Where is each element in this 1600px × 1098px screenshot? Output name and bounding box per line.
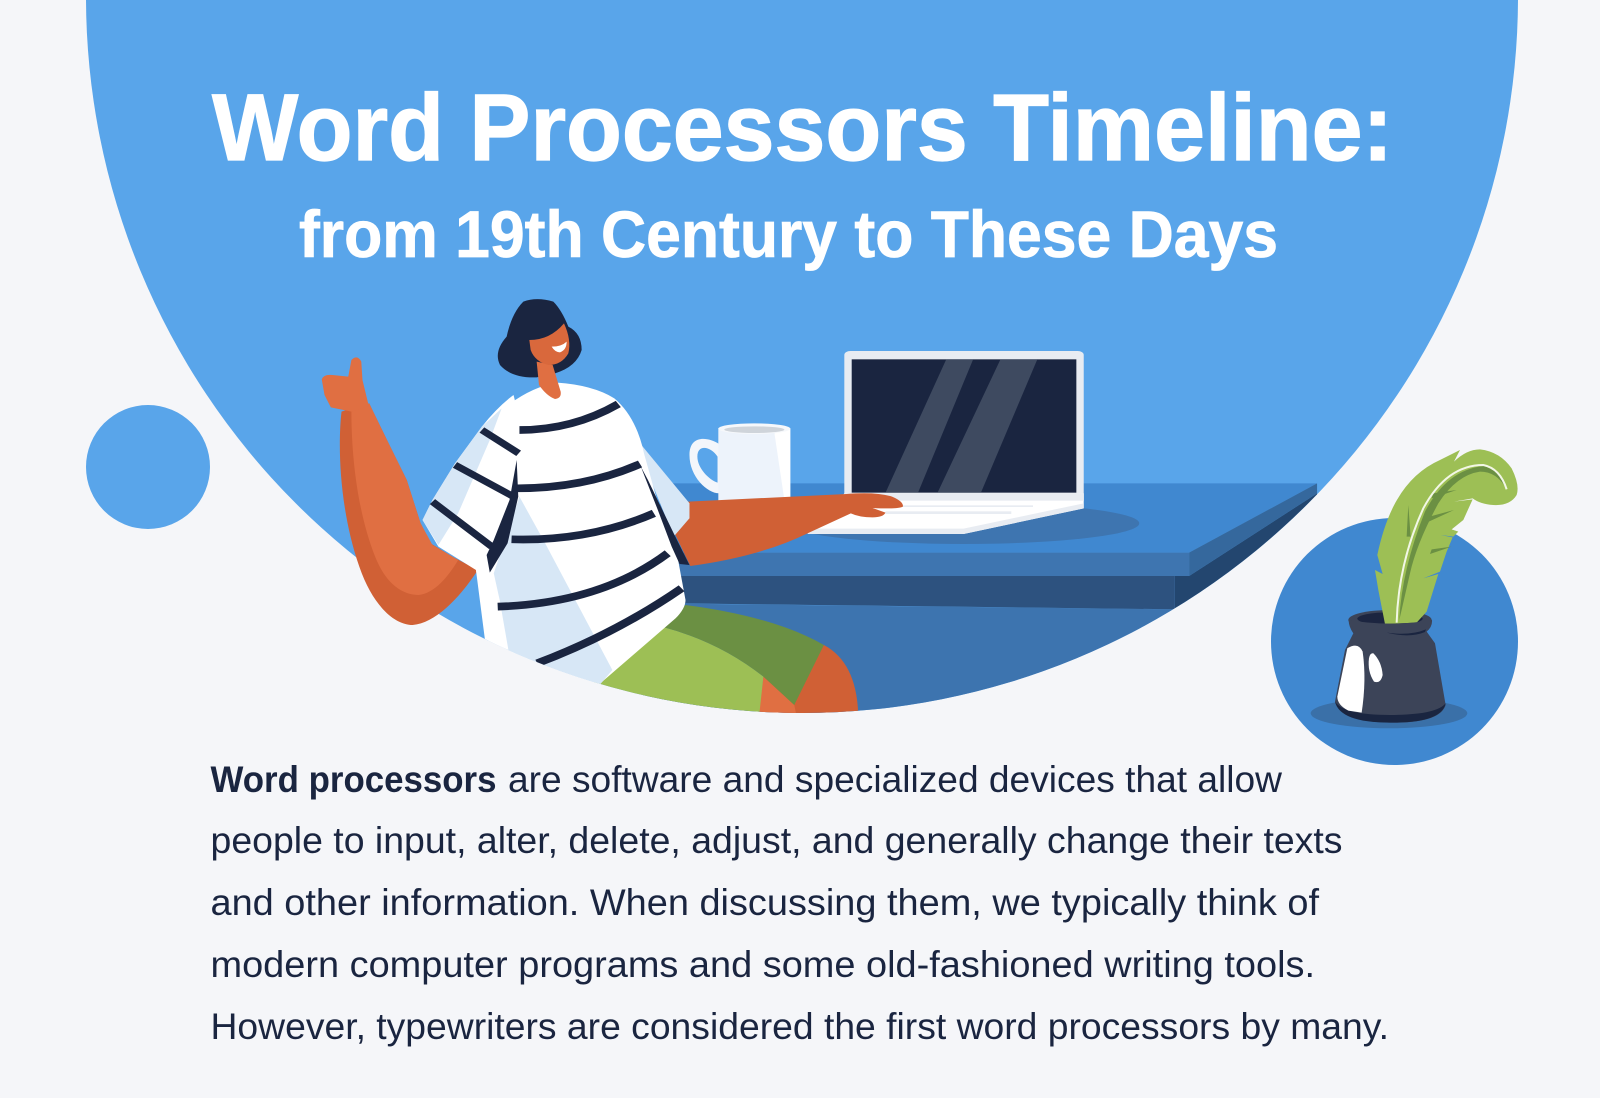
- line 1 bold term: Word processors: [210, 759, 496, 800]
- large blue header circle: [86, 0, 1518, 713]
- line 1: are software and specialized devices that allow: [508, 759, 1282, 800]
- line 5: However, typewriters are considered the first word processors by many.: [210, 1006, 1389, 1047]
- laptop: [807, 351, 1084, 534]
- head and hair: [498, 299, 582, 399]
- raised arm with thumbs up: [322, 357, 478, 625]
- desk: [643, 483, 1318, 713]
- small decorative blue circle: [86, 405, 210, 529]
- inkwell with quill badge: [1271, 449, 1518, 765]
- extended arm on keyboard: [673, 493, 903, 566]
- striped shirt: [423, 383, 689, 693]
- line 2: people to input, alter, delete, adjust, and generally change their texts: [210, 820, 1342, 861]
- title: Word Processors Timeline:: [212, 75, 1393, 181]
- shorts and leg: [594, 605, 858, 713]
- introduction paragraph: [210, 759, 1389, 1047]
- illustration: desk scene: [322, 299, 1518, 765]
- badge circle: [1271, 518, 1518, 765]
- subtitle: from 19th Century to These Days: [299, 197, 1278, 271]
- coffee mug: [689, 423, 790, 502]
- line 3: and other information. When discussing them, we typically think of: [210, 882, 1320, 923]
- line 4: modern computer programs and some old-fashioned writing tools.: [210, 944, 1315, 985]
- inkwell and feather: [1311, 449, 1518, 728]
